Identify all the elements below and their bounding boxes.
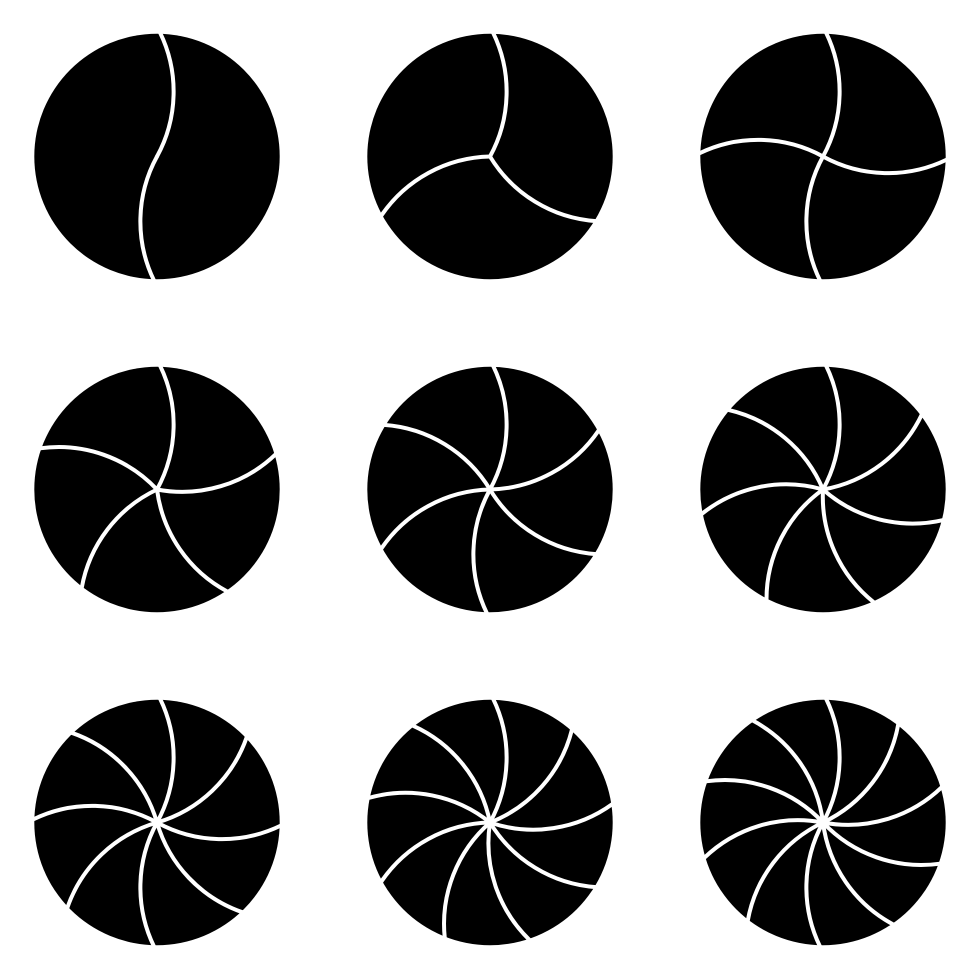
swirl circle: 3 segments — [367, 32, 613, 279]
swirl circle: 10 segments — [700, 698, 946, 946]
swirl circle: 6 segments — [367, 366, 613, 614]
swirl circle: 8 segments — [33, 698, 281, 946]
swirl circle: 2 segments — [34, 32, 280, 280]
swirl circle: 9 segments — [367, 698, 615, 945]
swirl circle: 5 segments — [34, 366, 280, 612]
swirl circle: 7 segments — [698, 366, 946, 612]
swirl circle: 4 segments — [699, 32, 947, 280]
